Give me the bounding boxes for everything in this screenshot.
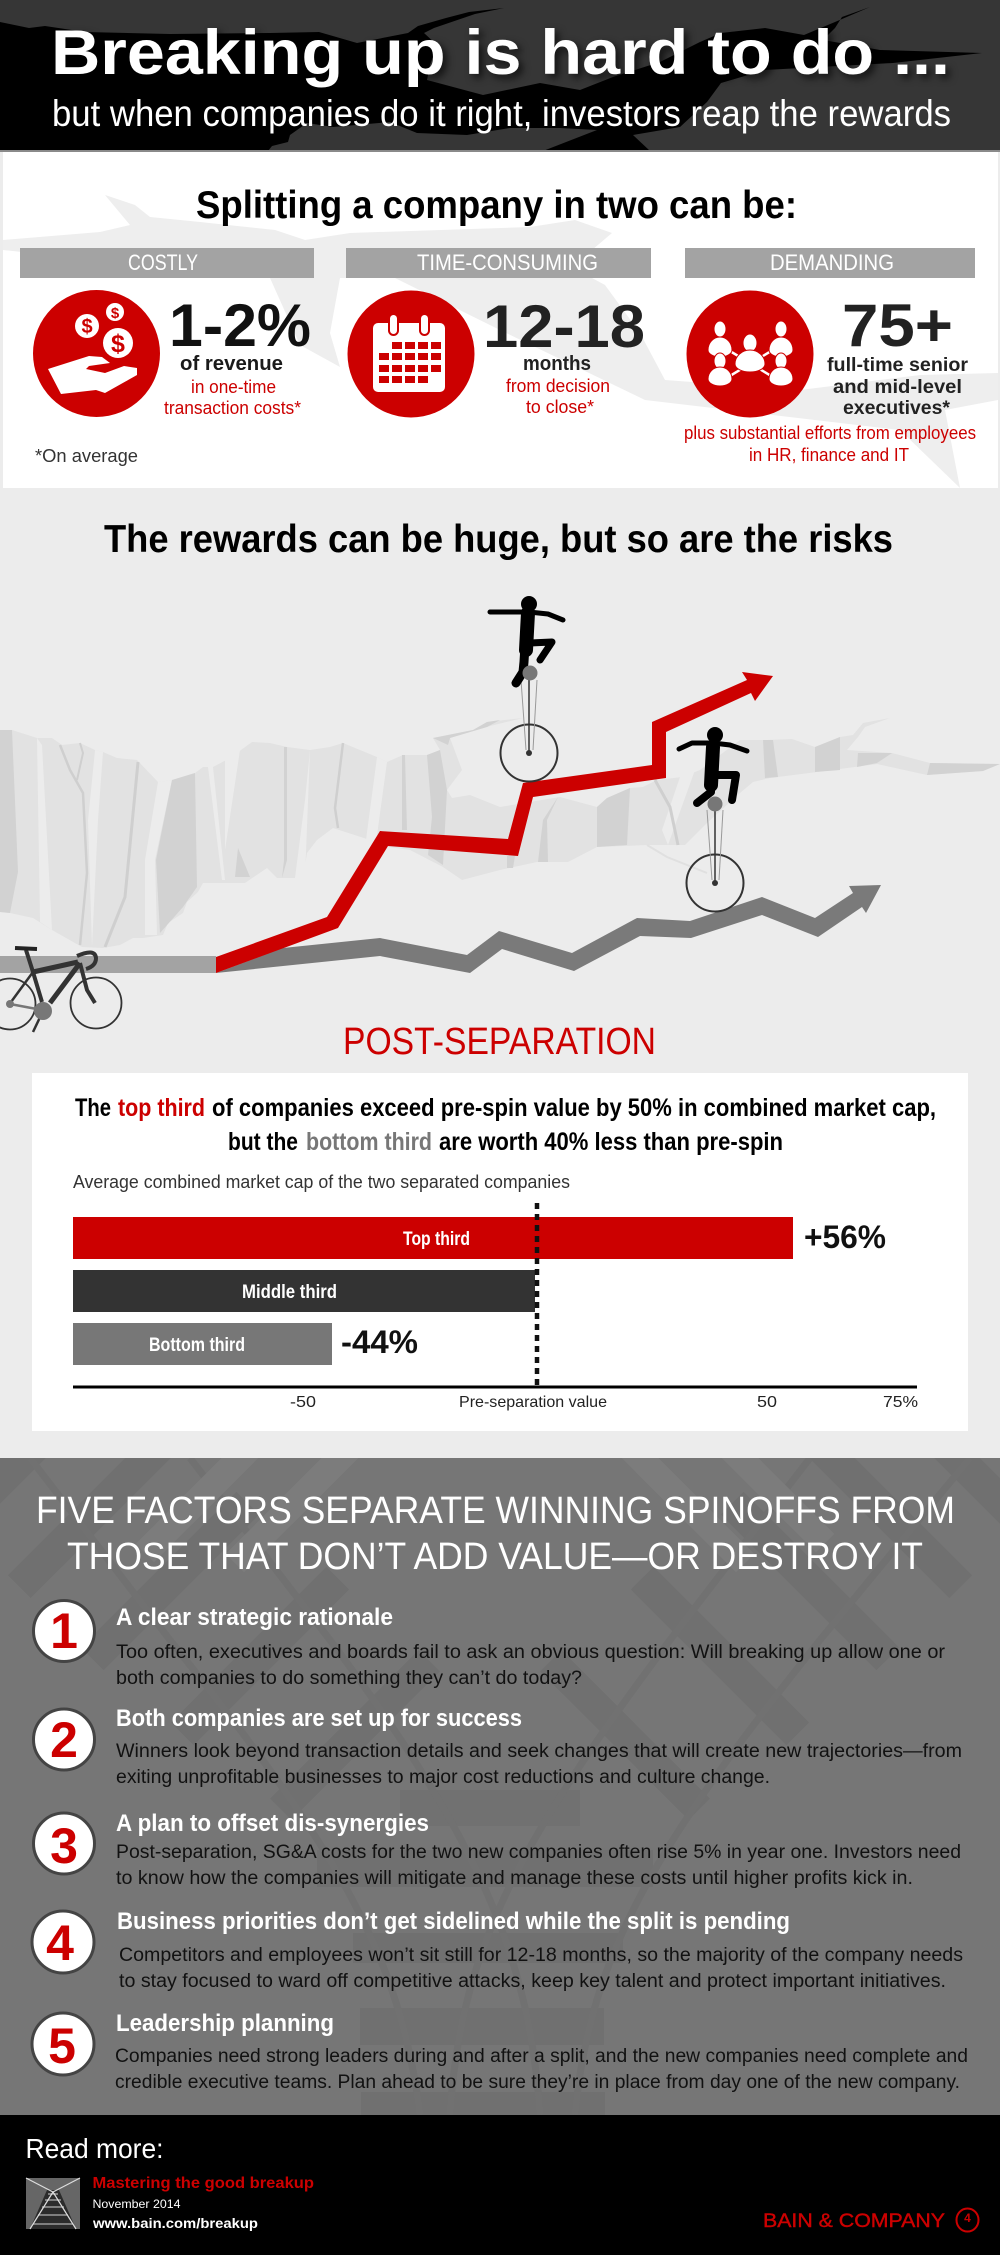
stat: 75+ executives: plus substantial efforts from employees — [684, 423, 976, 443]
icon: money in hand: $ — [81, 316, 93, 338]
factor 5: 5 — [48, 2018, 76, 2074]
icon: money in hand: $ — [111, 330, 125, 358]
factor 3 — [34, 1810, 961, 1889]
factor 1: 1 — [50, 1603, 78, 1659]
panel: splitting a company costs — [3, 152, 998, 488]
dotted pre-separation line — [535, 1203, 539, 1386]
heading: post-separation: POST-SEPARATION — [343, 1021, 656, 1063]
bar: bottom third: Bottom third — [149, 1335, 245, 1356]
title: Breaking up is hard to do ... — [51, 18, 950, 88]
factor 1: both companies to do something they can’t do today? — [116, 1668, 582, 1689]
chart headline — [75, 1094, 936, 1156]
axis: Pre-separation value — [459, 1394, 607, 1411]
label bar: time-consuming — [346, 248, 651, 278]
heading: rewards and risks: The rewards can be huge, but so are the risks — [104, 518, 893, 561]
bar: top third: +56% — [804, 1219, 886, 1255]
bar: top third: Top third — [403, 1229, 470, 1250]
label bar: demanding — [685, 248, 975, 278]
bar: middle third: Middle third — [242, 1282, 337, 1303]
stat: 12-18 months: months — [523, 353, 591, 375]
factor 2: 2 — [50, 1712, 78, 1768]
icon: people network — [686, 290, 814, 418]
baseline bar — [0, 956, 216, 973]
logo: Bain & Company: 4 — [964, 2211, 971, 2225]
factor 4: to stay focused to ward off competitive attacks, keep key talent and protect important initiatives. — [119, 1971, 946, 1992]
logo: Bain & Company: BAIN & COMPANY — [763, 2211, 945, 2232]
factor 4: 4 — [46, 1915, 74, 1971]
factor 4: Competitors and employees won’t sit still for 12-18 months, so the majority of the company needs — [119, 1945, 963, 1966]
axis: 50 — [757, 1394, 777, 1411]
red arrow — [216, 672, 773, 973]
factor 3: 3 — [50, 1818, 78, 1874]
factor 4: Business priorities don’t get sidelined while the split is pending — [117, 1908, 790, 1935]
icon: bicycle — [0, 948, 122, 1032]
axis: -50 — [290, 1394, 316, 1411]
stat: 12-18 months: to close* — [526, 397, 594, 417]
stat: 12-18 months: 12-18 — [483, 293, 645, 360]
chart subtitle: Average combined market cap of the two separated companies — [73, 1172, 570, 1192]
panel: five factors — [0, 1458, 1000, 2115]
logo: Bain & Company — [763, 2208, 978, 2232]
stat: 75+ executives: full-time senior — [827, 355, 969, 376]
stat: 1-2% of revenue — [164, 292, 311, 418]
section heading: FIVE FACTORS SEPARATE WINNING SPINOFFS FROM — [36, 1490, 955, 1532]
chart headline: but the — [228, 1128, 298, 1156]
grey arrow — [216, 885, 881, 973]
chart headline: The — [75, 1094, 111, 1122]
factor 2: exiting unprofitable businesses to major cost reductions and culture change. — [116, 1767, 770, 1788]
bar: bottom third — [73, 1323, 418, 1365]
stat: 75+ executives: executives* — [843, 398, 951, 419]
stat: 12-18 months — [483, 293, 645, 417]
stat: 12-18 months: from decision — [506, 376, 610, 396]
label bar: demanding: DEMANDING — [770, 250, 894, 275]
axis: 75% — [883, 1394, 918, 1411]
chart headline: bottom third — [306, 1128, 432, 1156]
factor 2 — [34, 1705, 962, 1788]
chart headline: are worth 40% less than pre-spin — [439, 1128, 783, 1156]
icon: calendar — [348, 290, 474, 418]
illustration: canyon with arrows and unicyclists — [0, 596, 1000, 1032]
factor 3: A plan to offset dis-synergies — [116, 1810, 429, 1837]
factor 3: Post-separation, SG&A costs for the two new companies often rise 5% in year one. Investors need — [116, 1842, 961, 1863]
stat: 1-2% of revenue: of revenue — [180, 353, 283, 375]
factor 2: Winners look beyond transaction details and seek changes that will create new trajectories—from — [116, 1741, 962, 1762]
subtitle: but when companies do it right, investors reap the rewards — [52, 93, 951, 134]
canyon wall — [0, 718, 1000, 948]
unicyclist lower — [679, 727, 747, 912]
stat: 1-2% of revenue: in one-time — [191, 377, 276, 397]
background: railway tracks — [32, 1611, 96, 2039]
stat: 75+ executives — [684, 292, 976, 465]
header banner — [0, 0, 1000, 152]
factor 1: A clear strategic rationale — [116, 1604, 393, 1631]
axis — [73, 1386, 918, 1411]
icon: money in hand — [33, 290, 160, 417]
factor 5: credible executive teams. Plan ahead to be sure they’re in place from day one of the new company. — [115, 2072, 960, 2093]
bar: bottom third: -44% — [341, 1324, 418, 1360]
stat: 75+ executives: in HR, finance and IT — [749, 445, 909, 465]
factor 5: Companies need strong leaders during and after a split, and the new companies need complete and — [115, 2046, 968, 2067]
article link: Mastering the good breakup — [92, 2175, 314, 2192]
footer — [0, 2115, 1000, 2255]
section heading: Splitting a company in two can be: — [196, 184, 797, 227]
factor 2: Both companies are set up for success — [116, 1705, 522, 1732]
panel: market cap chart — [32, 1073, 968, 1431]
bar: top third — [73, 1217, 886, 1259]
chart headline: top third — [118, 1094, 205, 1122]
footnote: *On average — [35, 446, 138, 466]
stat: 75+ executives: 75+ — [842, 292, 953, 359]
bar: middle third — [73, 1270, 535, 1312]
factor 3: to know how the companies will mitigate and manage these costs until higher profits kick in. — [116, 1868, 913, 1889]
stat: 75+ executives: and mid-level — [833, 377, 962, 398]
label bar: costly — [20, 248, 314, 278]
unicyclist top — [490, 596, 563, 782]
article link — [92, 2175, 314, 2231]
factor 1: Too often, executives and boards fail to ask an obvious question: Will breaking up allow one or — [116, 1642, 946, 1663]
thumbnail: railway photo — [26, 2178, 80, 2229]
article link: November 2014 — [92, 2197, 181, 2211]
factor 5 — [32, 2010, 968, 2093]
label bar: costly: COSTLY — [128, 250, 198, 275]
article link: www.bain.com/breakup — [92, 2215, 258, 2231]
stat: 1-2% of revenue: transaction costs* — [164, 398, 301, 418]
read more label: Read more: — [26, 2133, 164, 2164]
factor 1 — [34, 1600, 946, 1689]
stat: 1-2% of revenue: 1-2% — [169, 292, 311, 359]
factor 4 — [32, 1908, 963, 1992]
factor 5: Leadership planning — [116, 2010, 334, 2037]
icon: money in hand: $ — [111, 305, 120, 322]
panel: five factors: THOSE THAT DON’T ADD VALUE—OR DESTROY IT — [67, 1536, 923, 1578]
label bar: time-consuming: TIME-CONSUMING — [417, 250, 598, 275]
